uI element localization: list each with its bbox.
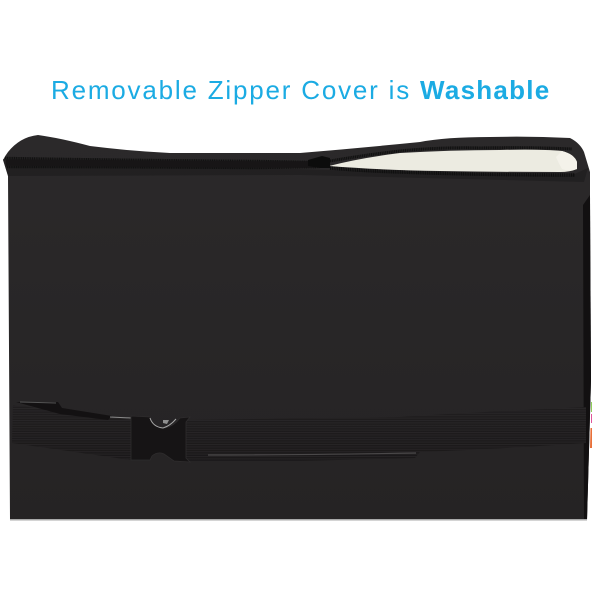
strap tail flap [16, 402, 112, 420]
zipper pull [308, 156, 330, 168]
bottom edge [10, 519, 587, 520]
buckle [131, 416, 190, 462]
top edge shading [3, 159, 588, 182]
right edge side panel [583, 195, 591, 520]
title: Removable Zipper Cover is Washable [51, 75, 550, 105]
strap [12, 402, 586, 461]
zipper [5, 148, 575, 175]
colour slivers at right edge [591, 402, 592, 412]
cushion: black cover [3, 135, 592, 520]
foam insert visible through open zipper [329, 150, 577, 172]
